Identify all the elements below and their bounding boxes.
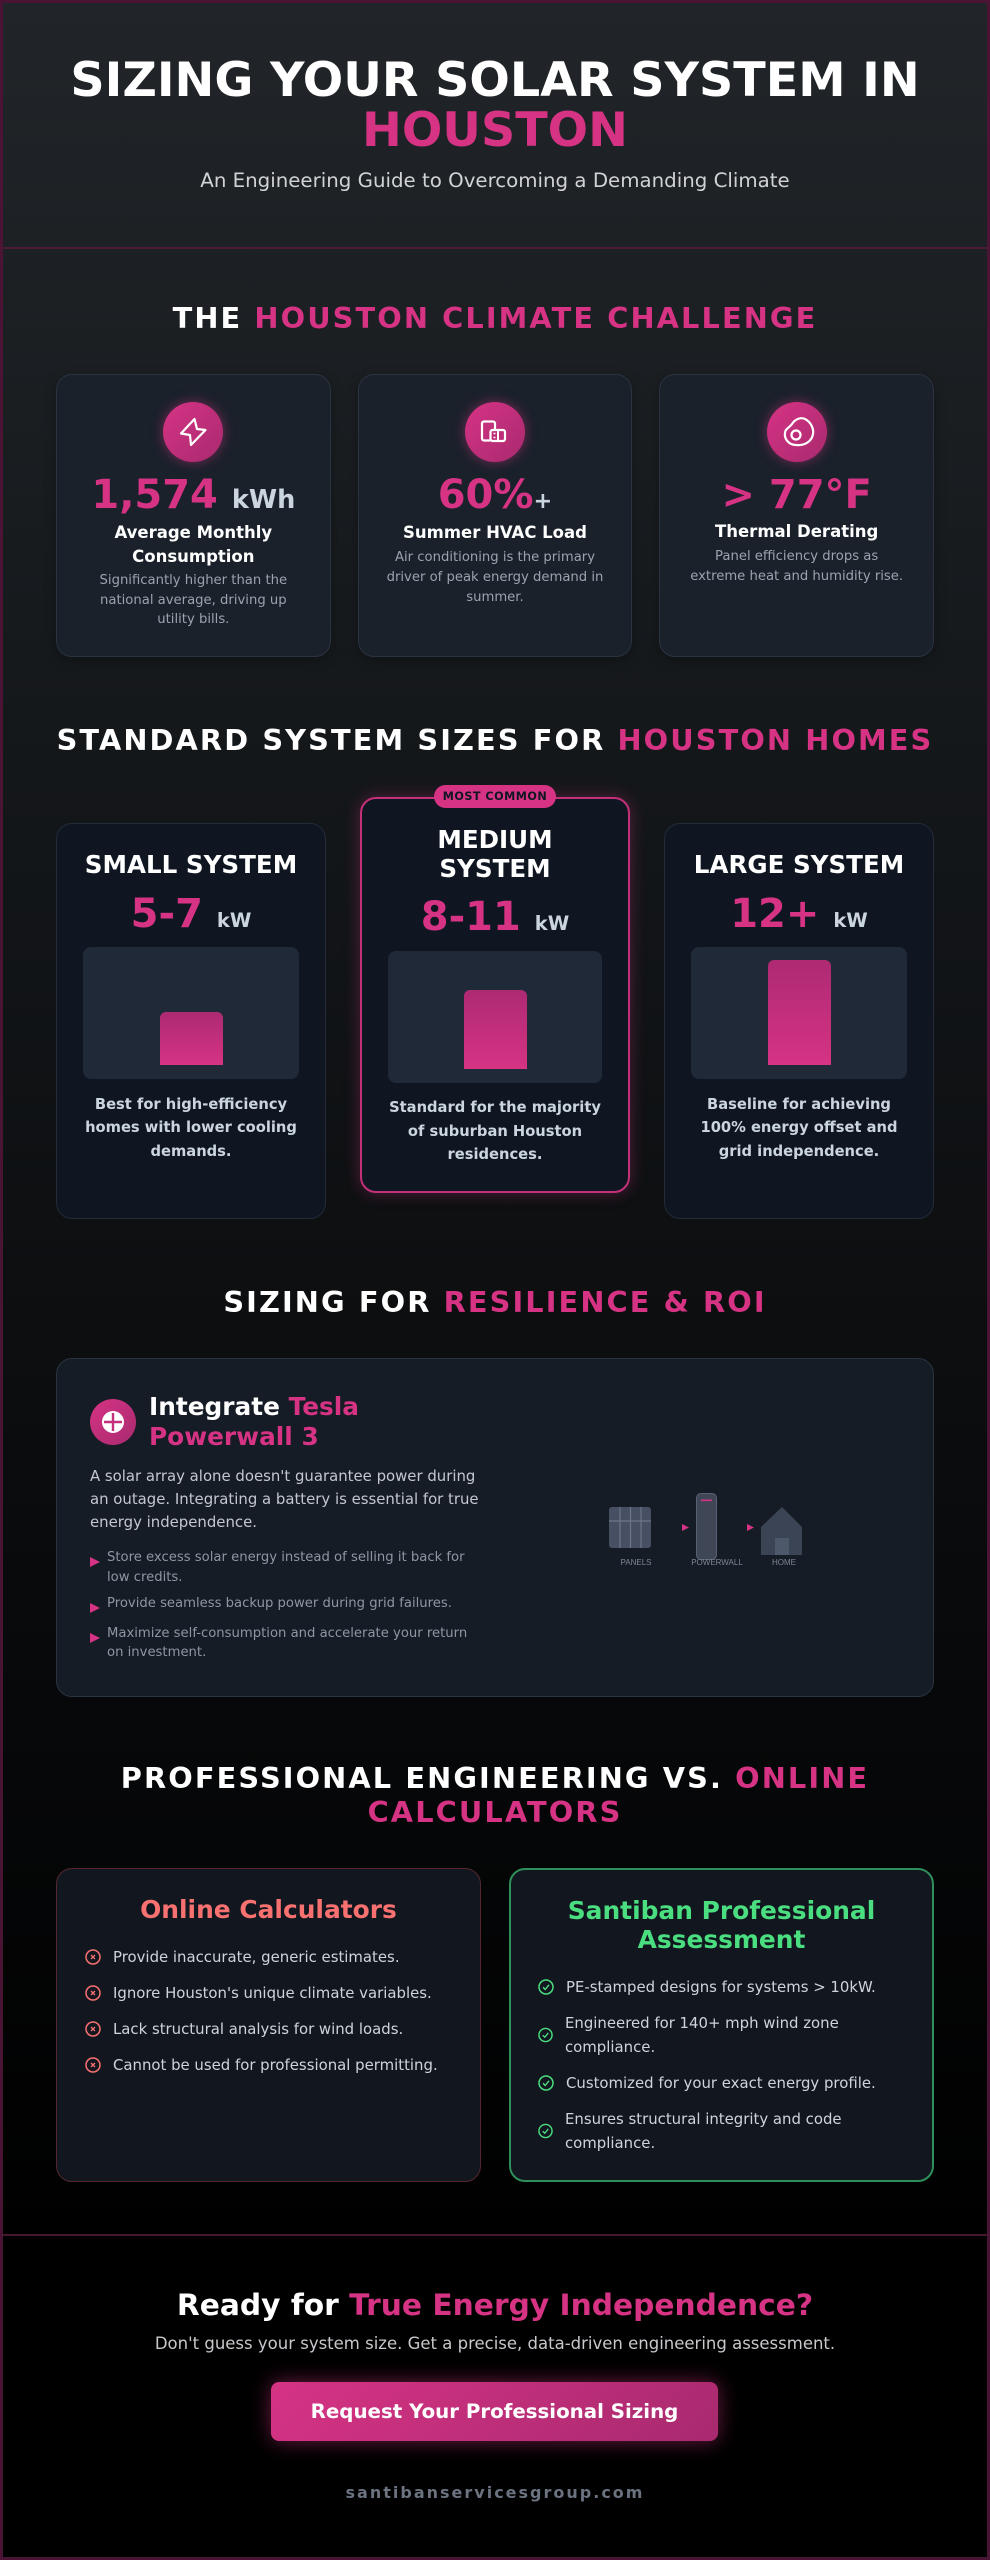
item: Customized for your exact energy profile. (566, 2074, 876, 2092)
item: Lack structural analysis for wind loads. (113, 2020, 403, 2038)
arrow: powerwall to home (747, 1524, 754, 1531)
description line 2: of suburban Houston (408, 1123, 582, 1140)
icon: home (761, 1507, 802, 1555)
panel: professional assessment (509, 1868, 934, 2182)
panel heading: Online Calculators (140, 1895, 397, 1924)
panel: average monthly consumption (56, 374, 331, 657)
icon: HVAC unit (465, 402, 525, 462)
footer divider (3, 2234, 987, 2236)
icon: x (85, 1949, 101, 1965)
icon: powerwall (696, 1494, 716, 1560)
item line 2: compliance. (565, 2134, 655, 2152)
heading: resilience and ROI: SIZING FOR RESILIENCE & ROI (223, 1285, 767, 1319)
bar (464, 990, 526, 1069)
panel: thermal derating (659, 374, 934, 657)
label: home: HOME (772, 1558, 796, 1567)
description line 3: demands. (150, 1143, 231, 1160)
bullet text 2: Provide seamless backup power during grid failures. (107, 1596, 452, 1611)
bullet arrow 3 (90, 1633, 100, 1643)
title: HOUSTON (362, 103, 628, 158)
bar (160, 1012, 222, 1065)
heading: engineering vs calculators: CALCULATORS (368, 1795, 622, 1829)
description line 3: residences. (448, 1146, 542, 1163)
description: Baseline for achieving (707, 1096, 891, 1113)
badge: most common: MOST COMMON (443, 790, 547, 803)
website: santibanservicesgroup.com (346, 2483, 644, 2502)
badge: most common (434, 785, 556, 808)
description line 3: utility bills. (157, 612, 229, 627)
stat label: Summer HVAC Load (403, 523, 587, 542)
bullet text 1: Store excess solar energy instead of selling it back for (107, 1550, 465, 1565)
diagram: panels to powerwall to home (609, 1493, 802, 1567)
description line 2: homes with lower cooling (85, 1119, 297, 1136)
system name line 2: SYSTEM (439, 854, 551, 883)
description line 2: 100% energy offset and (700, 1119, 898, 1136)
icon: x (85, 2021, 101, 2037)
icon: plus circle (90, 1399, 136, 1445)
heading: engineering vs calculators: PROFESSIONAL ENGINEERING VS. ONLINE (121, 1761, 869, 1795)
bullet arrow 1 (90, 1557, 100, 1567)
system name: SMALL SYSTEM (85, 850, 297, 879)
heading: engineering vs calculators (121, 1761, 869, 1829)
stat label: Average Monthly (114, 523, 272, 542)
description line 2: driver of peak energy demand in (387, 570, 603, 585)
item: PE-stamped designs for systems > 10kW. (566, 1978, 876, 1996)
panel heading line 2: Assessment (638, 1925, 805, 1954)
bar chart: medium (388, 951, 602, 1083)
description: Air conditioning is the primary (395, 550, 595, 565)
stat label: Thermal Derating (715, 522, 878, 541)
icon: check (538, 2028, 553, 2042)
system name: LARGE SYSTEM (694, 850, 904, 879)
description line 3: summer. (466, 590, 524, 605)
icon: x (85, 1985, 101, 2001)
arrow: panels to powerwall (682, 1524, 689, 1531)
panel heading: Santiban Professional (568, 1896, 875, 1925)
item: Ignore Houston's unique climate variables. (113, 1984, 432, 2002)
item line 2: compliance. (565, 2038, 655, 2056)
stat value: 60%+ (438, 472, 552, 518)
panel: online calculators (56, 1868, 481, 2182)
description: Significantly higher than the (100, 573, 287, 588)
description: Standard for the majority (389, 1099, 601, 1116)
panel: small system (56, 823, 326, 1219)
icon: x (85, 2057, 101, 2073)
system size value: 12+ kW (730, 891, 868, 937)
item: Engineered for 140+ mph wind zone (565, 2014, 839, 2032)
description: Best for high-efficiency (95, 1096, 287, 1113)
bar chart: large (691, 947, 907, 1079)
heading: system sizes: STANDARD SYSTEM SIZES FOR HOUSTON HOMES (57, 723, 933, 757)
paragraph: A solar array alone doesn't guarantee power during (90, 1467, 475, 1485)
panel heading: Integrate Tesla (149, 1392, 359, 1421)
panel: large system (664, 823, 934, 1219)
description: Panel efficiency drops as (715, 549, 878, 564)
system size value: 8-11 kW (421, 894, 569, 940)
panel: medium system (360, 797, 630, 1193)
icon: check (538, 2124, 553, 2138)
system size value: 5-7 kW (131, 891, 251, 937)
call to action text: Don't guess your system size. Get a precise, data-driven engineering assessment. (155, 2334, 835, 2353)
description line 2: extreme heat and humidity rise. (690, 569, 903, 584)
item: Provide inaccurate, generic estimates. (113, 1948, 400, 1966)
panel: Powerwall integration (56, 1358, 934, 1697)
label: powerwall: POWERWALL (691, 1558, 743, 1567)
stat label line 2: Consumption (132, 547, 255, 566)
heading: climate challenge: THE HOUSTON CLIMATE CHALLENGE (173, 301, 817, 335)
bullet arrow 2 (90, 1603, 100, 1613)
panel heading line 2: Powerwall 3 (149, 1422, 319, 1451)
paragraph line 2: an outage. Integrating a battery is essential for true (90, 1490, 479, 1508)
icon: solar panels (609, 1507, 651, 1548)
description line 3: grid independence. (719, 1143, 879, 1160)
icon: thermal swirl (767, 402, 827, 462)
stat value: > 77°F (721, 472, 872, 518)
description line 2: national average, driving up (100, 593, 287, 608)
item: Cannot be used for professional permitting. (113, 2056, 438, 2074)
bar (768, 960, 830, 1065)
icon: check (538, 1979, 554, 1995)
system name: MEDIUM (437, 825, 553, 854)
icon: check (538, 2075, 554, 2091)
button: request sizing: Request Your Professional Sizing (311, 2400, 678, 2423)
bullet text 3: Maximize self-consumption and accelerate your return (107, 1626, 467, 1641)
header divider (3, 247, 987, 249)
item: Ensures structural integrity and code (565, 2110, 842, 2128)
bullet text 1 line 2: low credits. (107, 1570, 182, 1585)
icon: lightning bolt (163, 402, 223, 462)
button: request sizing (271, 2382, 718, 2441)
title: SIZING YOUR SOLAR SYSTEM IN (70, 53, 920, 108)
label: panels: PANELS (621, 1558, 651, 1567)
stat value: 1,574 kWh (91, 472, 295, 518)
subtitle: An Engineering Guide to Overcoming a Demanding Climate (200, 169, 790, 192)
bar chart: small (83, 947, 299, 1079)
panel: summer HVAC load (358, 374, 632, 657)
call to action heading: Ready for True Energy Independence? (177, 2288, 813, 2323)
title (70, 53, 920, 158)
bullet text 3 line 2: on investment. (107, 1645, 206, 1660)
paragraph line 3: energy independence. (90, 1513, 257, 1531)
